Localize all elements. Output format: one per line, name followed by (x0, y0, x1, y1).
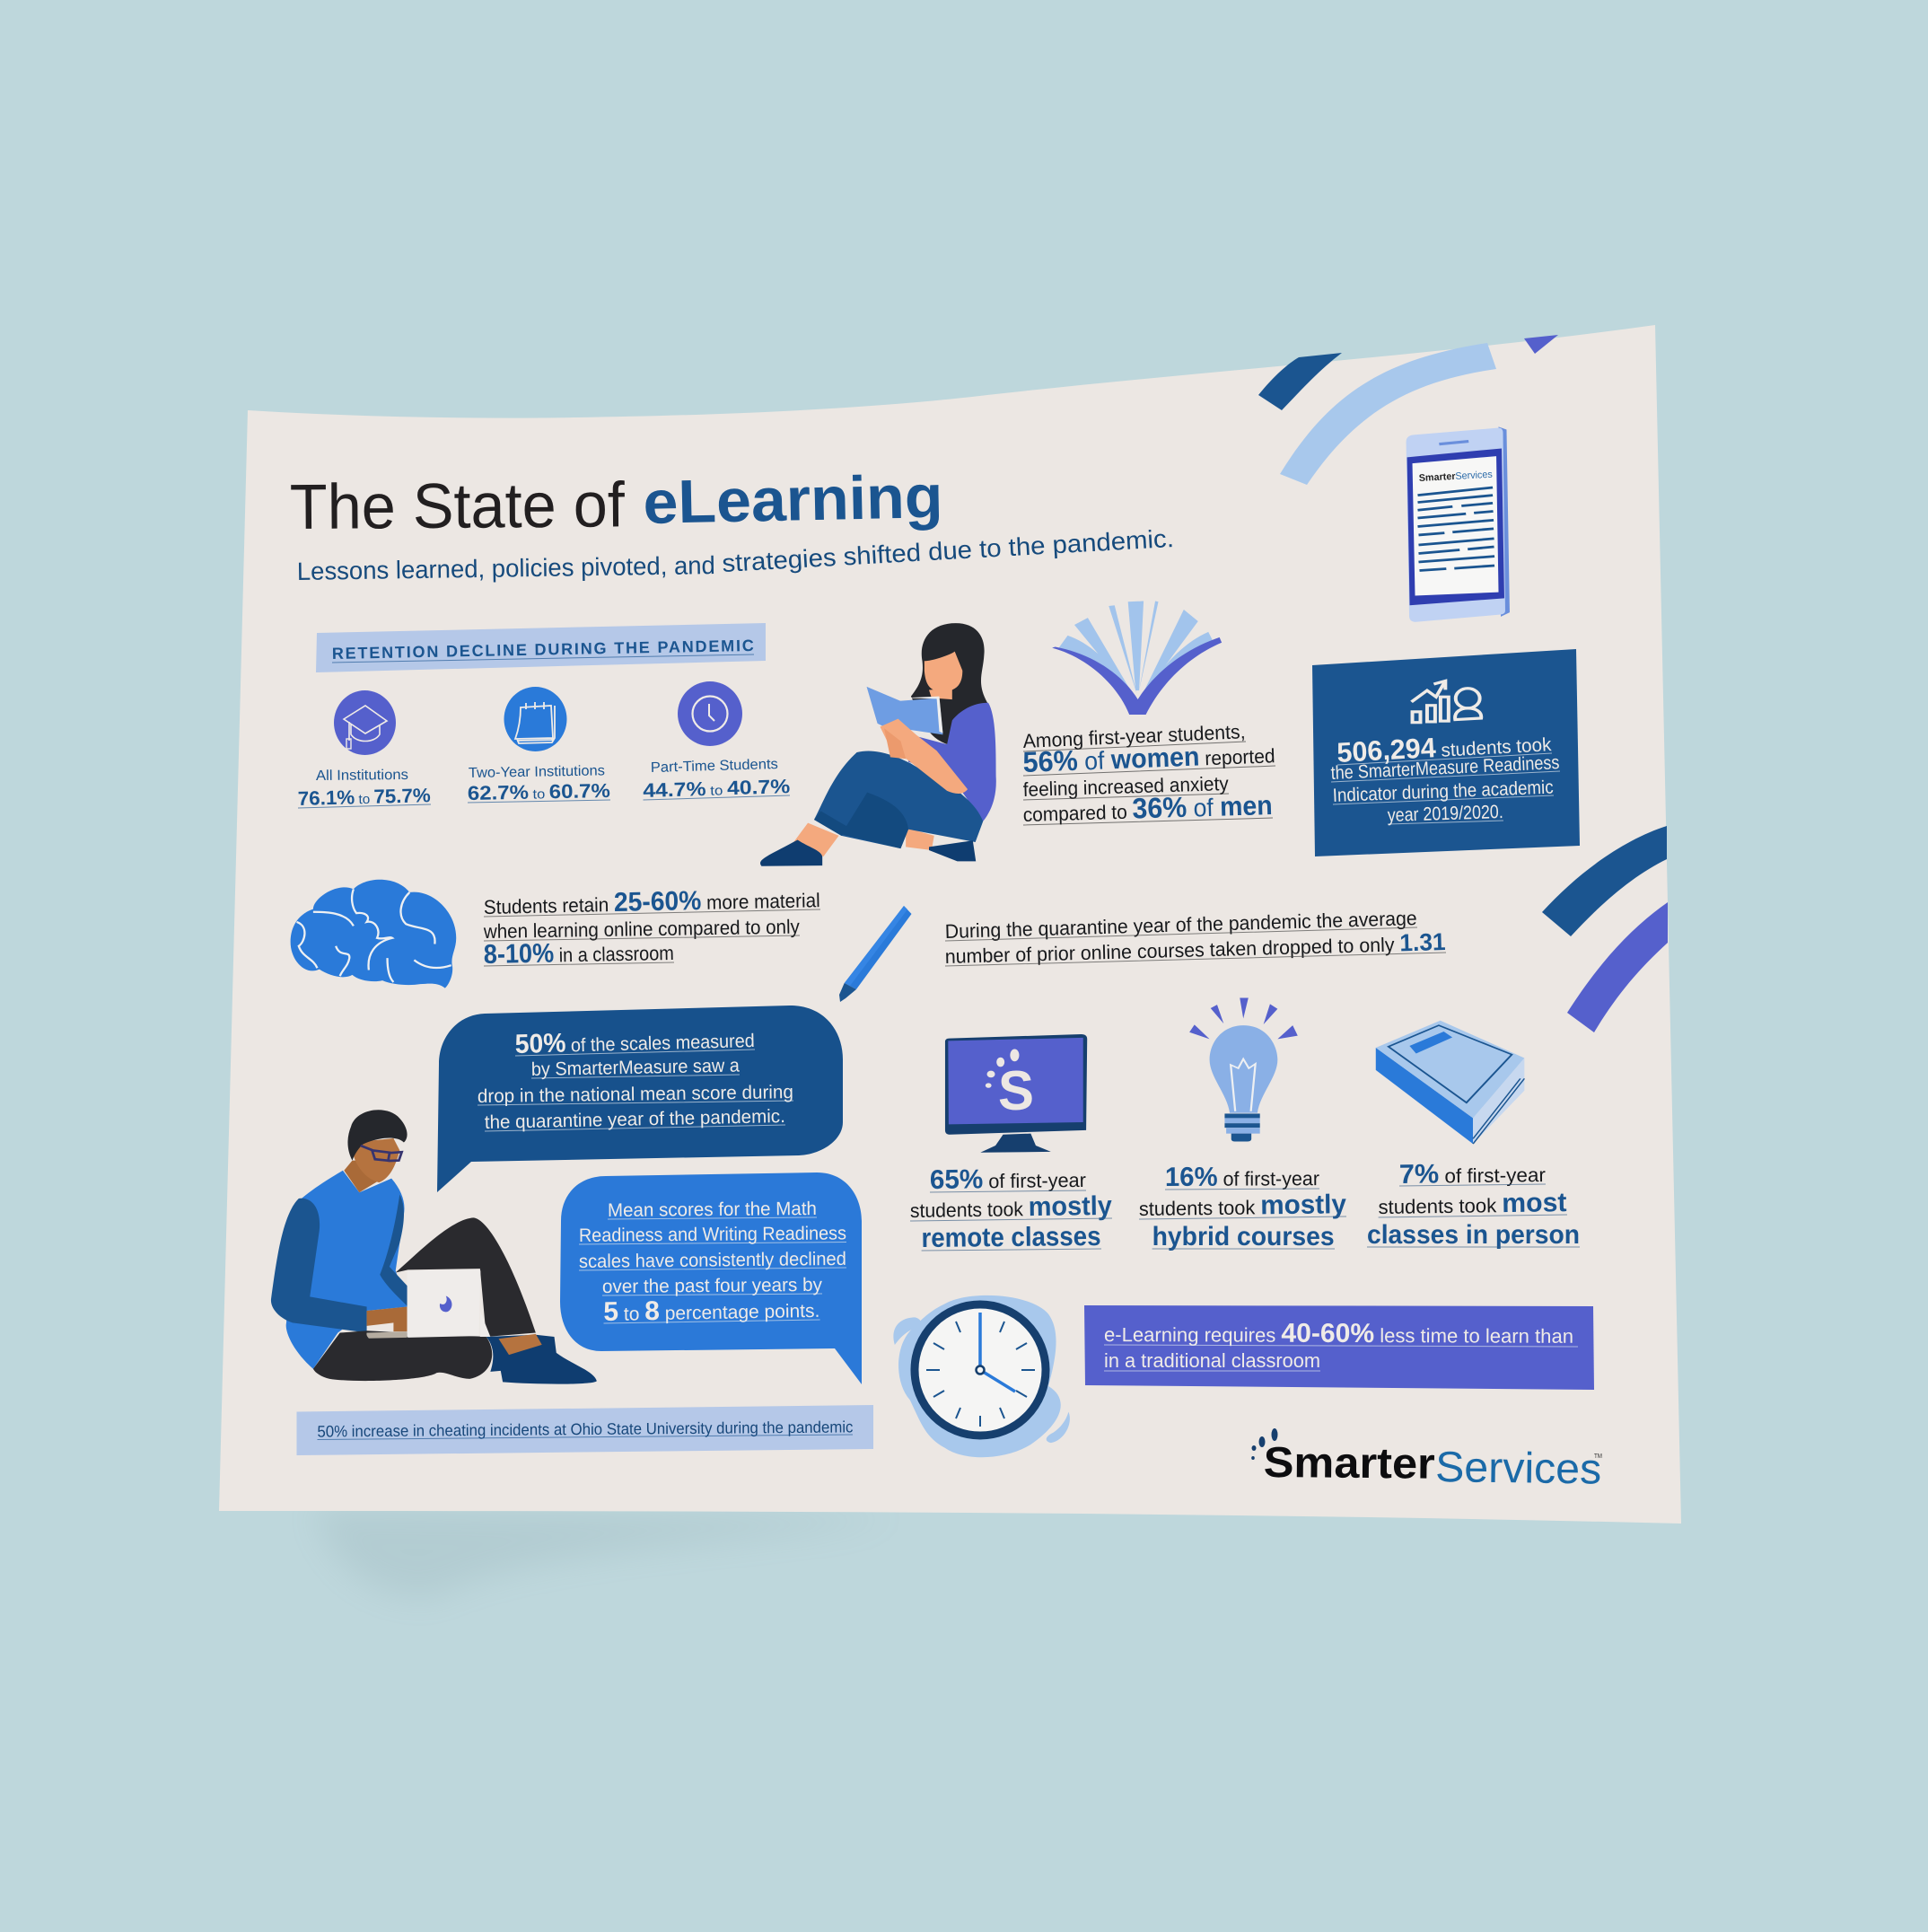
retention stat: all institutions: 76.1% to 75.7% (297, 784, 431, 810)
decorative arcs right edge (1542, 826, 1668, 1032)
panel: 506,294 students: year 2019/2020. (1387, 802, 1503, 826)
stat: remote classes (910, 1164, 1112, 1253)
logo: SmarterServices: Smarter (1264, 1439, 1435, 1489)
retention stat: two-year institutions (468, 763, 610, 804)
icon: light bulb (1189, 997, 1298, 1141)
subtitle (297, 524, 1175, 585)
text: retention of material (483, 883, 820, 970)
title: eLearning (643, 462, 943, 537)
retention stat: two-year institutions: Two-Year Institutions (469, 763, 605, 781)
text: quarantine courses: number of prior online courses taken dropped to only 1.31 (944, 928, 1446, 969)
retention stat: part-time students (643, 757, 791, 802)
retention stat: part-time students: Part-Time Students (651, 757, 778, 776)
retention heading banner: RETENTION DECLINE DURING THE PANDEMIC (332, 637, 754, 663)
logo: SmarterServices: TM (1594, 1453, 1602, 1460)
icon: brain (291, 880, 456, 988)
speech bubble: mean scores: scales have consistently declined (579, 1249, 846, 1272)
speech bubble: 50% of scales: the quarantine year of the pandemic. (485, 1106, 785, 1133)
tablet logo: SmarterServices (1419, 470, 1494, 484)
banner: cheating incidents: 50% increase in cheating incidents at Ohio State University during the pandemic (317, 1418, 854, 1441)
panel: time to learn (1084, 1305, 1594, 1390)
title (290, 462, 943, 543)
speech bubble: mean scores: Readiness and Writing Readiness (579, 1223, 846, 1246)
speech bubble: mean scores: 5 to 8 percentage points. (603, 1294, 820, 1327)
icon: calendar (504, 687, 567, 751)
icon: clock (678, 681, 742, 746)
speech bubble: mean scores: Mean scores for the Math (608, 1199, 817, 1221)
icon: open book fan (1052, 601, 1222, 715)
stat: hybrid courses: hybrid courses (1152, 1222, 1335, 1251)
panel: 506,294 students: Indicator during the academic (1332, 777, 1554, 806)
text: anxiety stat: Among first-year students, (1022, 720, 1246, 752)
retention heading banner (316, 623, 766, 672)
text: anxiety stat (1022, 720, 1275, 828)
stat: classes in person (1367, 1158, 1580, 1250)
stat: classes in person: classes in person (1367, 1220, 1580, 1250)
panel: time to learn: in a traditional classroom (1104, 1349, 1320, 1372)
icon: graduation cap (334, 690, 396, 755)
logo: SmarterServices: Services (1435, 1444, 1602, 1494)
stat: classes in person: students took most (1378, 1188, 1567, 1220)
stat: remote classes: 65% of first-year (930, 1164, 1086, 1195)
stat: classes in person: 7% of first-year (1399, 1158, 1546, 1190)
panel: 506,294 students: the SmarterMeasure Readiness (1330, 752, 1560, 784)
subtitle: Lessons learned, policies pivoted, and (297, 551, 715, 585)
retention stat: all institutions (297, 768, 431, 810)
text: retention of material: when learning online compared to only (483, 915, 800, 943)
panel: retention decline (297, 623, 791, 810)
speech bubble: mean scores (560, 1172, 862, 1384)
speech bubble: 50% of scales: 50% of the scales measured (514, 1023, 755, 1059)
monitor logo letter: S (998, 1060, 1034, 1122)
text: retention of material: Students retain 25-60% more material (483, 883, 820, 920)
retention stat: two-year institutions: 62.7% to 60.7% (468, 779, 610, 804)
stat: hybrid courses (1139, 1162, 1346, 1251)
text: retention of material: 8-10% in a classroom (484, 936, 674, 970)
logo: SmarterServices (1251, 1428, 1602, 1494)
stat: remote classes: remote classes (921, 1222, 1101, 1253)
retention stat: all institutions: All Institutions (316, 768, 408, 784)
icon: chart and person (1412, 681, 1481, 723)
text: anxiety stat: 56% of women reported (1022, 736, 1275, 778)
subtitle: strategies shifted due to the pandemic. (722, 524, 1175, 577)
banner: cheating incidents (296, 1405, 873, 1455)
retention stat: part-time students: 44.7% to 40.7% (643, 775, 791, 802)
title: The State of (290, 470, 625, 543)
icon: pen (839, 906, 912, 1002)
icon: book (1376, 1021, 1524, 1144)
panel: 506,294 students (1312, 649, 1580, 856)
icon: monitor (945, 1034, 1087, 1153)
speech bubble: 50% of scales: by SmarterMeasure saw a (531, 1056, 740, 1080)
icon: tablet with document (1407, 426, 1510, 622)
speech bubble: mean scores: over the past four years by (602, 1275, 823, 1297)
icon: wall clock (893, 1295, 1070, 1457)
panel: 506,294 students: 506,294 students took (1336, 725, 1553, 768)
illustration: man with laptop (271, 1110, 597, 1384)
paper sheet (219, 325, 1681, 1524)
paper shadow (314, 1508, 898, 1598)
stat: hybrid courses: 16% of first-year (1165, 1162, 1319, 1192)
text: anxiety stat: feeling increased anxiety (1022, 772, 1229, 801)
decorative arcs top right (1258, 335, 1558, 485)
text: quarantine courses (944, 907, 1446, 969)
speech bubble: 50% of scales: drop in the national mean score during (478, 1082, 793, 1107)
stat: remote classes: students took mostly (910, 1191, 1112, 1224)
panel: time to learn: e-Learning requires 40-60% less time to learn than (1104, 1318, 1573, 1349)
text: anxiety stat: compared to 36% of men (1022, 788, 1273, 828)
illustration: woman reading (760, 623, 996, 866)
speech bubble: 50% of scales (437, 1006, 843, 1192)
stat: hybrid courses: students took mostly (1139, 1190, 1346, 1222)
text: quarantine courses: During the quarantine year of the pandemic the average (944, 907, 1417, 943)
